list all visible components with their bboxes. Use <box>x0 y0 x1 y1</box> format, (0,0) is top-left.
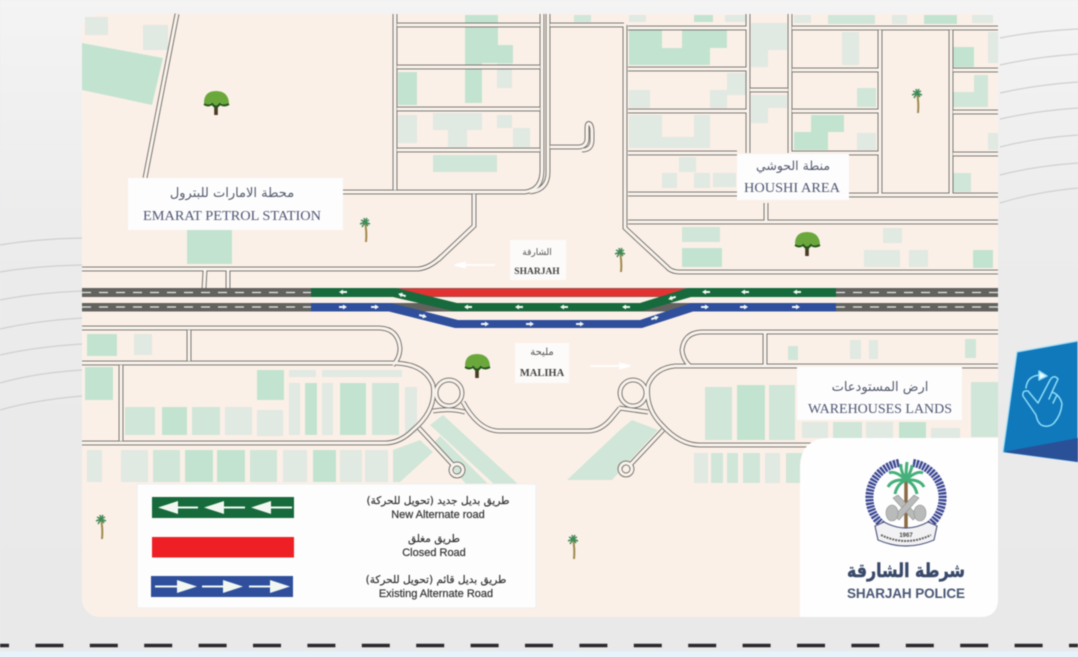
panel: Sharjah Police logo <box>800 438 998 617</box>
secondary road network <box>82 14 998 476</box>
label: Emarat petrol station: محطة الامارات للبترول <box>170 186 294 201</box>
emblem crossed swords <box>886 495 926 521</box>
legend: existing alternate road <box>151 574 506 600</box>
legend: closed road: Closed Road <box>402 547 466 559</box>
logo Arabic name: شرطة الشارقة <box>847 560 965 582</box>
main carriageways <box>82 288 998 312</box>
label: Warehouses lands: ارض المستودعات <box>832 380 928 395</box>
label: Emarat petrol station: EMARAT PETROL STATION <box>143 209 321 224</box>
legend: existing alternate road: Existing Alternate Road <box>379 588 493 600</box>
icon: police emblem <box>869 462 943 546</box>
label: Sharjah direction <box>455 240 566 280</box>
closed road section <box>400 288 684 296</box>
icon: swipe hand <box>1023 371 1062 426</box>
emblem palm tree <box>888 462 924 528</box>
label: Sharjah direction: الشارقة <box>522 248 552 258</box>
legend: existing alternate road: طريق بديل قائم (تحويل للحركة) <box>366 574 506 586</box>
map panel <box>82 14 998 617</box>
legend <box>137 484 536 608</box>
new alternate road <box>311 288 836 311</box>
label: Maliha direction <box>515 343 630 383</box>
legend: closed road <box>152 533 466 559</box>
existing alternate road <box>311 303 836 328</box>
label: Maliha direction: مليحة <box>530 347 554 358</box>
legend: new alternate road: طريق بديل جديد (تحويل للحركة) <box>366 495 510 507</box>
green land plots <box>82 15 998 484</box>
label: Maliha direction: MALIHA <box>520 368 565 379</box>
logo English name: SHARJAH POLICE <box>847 586 965 601</box>
label: Houshi area: HOUSHI AREA <box>744 181 841 196</box>
background contour lines <box>0 29 1078 410</box>
side tab with hand icon <box>1003 341 1078 462</box>
label: Warehouses lands: WAREHOUSES LANDS <box>808 402 952 417</box>
label: Houshi area <box>737 154 849 200</box>
label: Sharjah direction: SHARJAH <box>514 267 560 277</box>
legend: new alternate road: New Alternate road <box>391 509 485 521</box>
map base <box>82 14 998 617</box>
label: Houshi area: منطة الحوشي <box>756 158 830 174</box>
label: Emarat petrol station <box>128 178 343 230</box>
emblem wreath <box>869 463 943 526</box>
footer strip <box>0 651 1078 657</box>
footer dashed divider <box>0 644 1078 647</box>
emblem ribbon: 1967 <box>899 533 913 539</box>
label: Warehouses lands <box>797 367 962 420</box>
legend: closed road: طريق مغلق <box>408 533 460 545</box>
trees <box>204 91 820 378</box>
legend: new alternate road <box>152 495 510 521</box>
palm trees <box>96 89 922 559</box>
